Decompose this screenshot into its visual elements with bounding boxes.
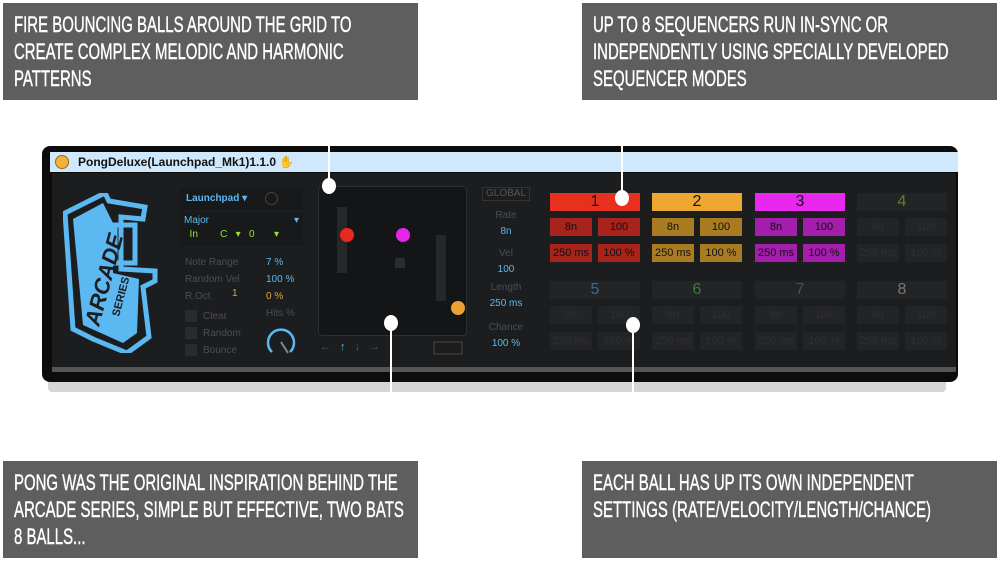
- device panel: 6: [693, 281, 701, 298]
- device panel: 8n: [667, 309, 679, 321]
- device panel: 250 ms: [860, 247, 896, 259]
- callout: each ball settings: [582, 461, 997, 558]
- global column: GLOBAL: [486, 188, 526, 199]
- logo: arcade series: [63, 193, 158, 353]
- device panel: 100: [815, 221, 833, 233]
- device panel: Chance: [489, 322, 523, 333]
- icon: orange circle: [55, 155, 69, 169]
- callout: up to 8 sequencers: [582, 3, 997, 100]
- parameters: Random Vel: [185, 274, 239, 285]
- device panel: 250 ms: [655, 335, 691, 347]
- device panel: Length: [491, 282, 521, 293]
- title bar: PongDeluxe(Launchpad_Mk1)1.1.0 ✋: [78, 155, 294, 169]
- device panel: 4: [898, 193, 906, 210]
- device panel: Rate: [495, 210, 517, 221]
- device panel: 100: [610, 309, 628, 321]
- device panel: 100 %: [910, 247, 942, 259]
- toggles: Random: [203, 328, 241, 339]
- scale selector: Major: [184, 215, 209, 226]
- device panel: 250 ms: [553, 335, 589, 347]
- sequencers: [550, 193, 942, 347]
- device panel: 8n: [500, 226, 512, 237]
- callout lines: [328, 100, 330, 186]
- device panel: 0 %: [266, 291, 283, 302]
- callout: pong inspiration: [3, 461, 418, 558]
- callout: each ball settings: SETTINGS (RATE/VELOCITY/LENGTH/CHANCE): [593, 497, 931, 522]
- device panel: 100 %: [910, 335, 942, 347]
- toggles: [185, 310, 241, 356]
- callout: fire bouncing balls: CREATE COMPLEX MELODIC AND HARMONIC: [14, 39, 344, 64]
- device panel: 250 ms: [860, 335, 896, 347]
- callout: pong inspiration: 8 BALLS...: [14, 524, 86, 549]
- parameters: [185, 257, 239, 302]
- device frame: [42, 146, 958, 382]
- device panel: 2: [693, 193, 701, 210]
- device panel: 8n: [770, 309, 782, 321]
- device panel: 8n: [667, 221, 679, 233]
- device panel: Hits %: [266, 308, 295, 319]
- device panel: 7 %: [266, 257, 283, 268]
- callout: pong inspiration: ARCADE SERIES, SIMPLE BUT EFFECTIVE, TWO BATS: [14, 497, 404, 522]
- callout: up to 8 sequencers: INDEPENDENTLY USING SPECIALLY DEVELOPED: [593, 39, 949, 64]
- launchpad selector: [180, 187, 303, 210]
- device panel: 8n: [872, 309, 884, 321]
- device panel: 100 %: [603, 335, 635, 347]
- scale selector: [180, 212, 303, 246]
- arrow buttons: ←↑↓→: [320, 341, 389, 353]
- device panel: 100 %: [808, 335, 840, 347]
- device panel: 8: [898, 281, 906, 298]
- device panel: 7: [796, 281, 804, 298]
- device panel: 3: [796, 193, 804, 210]
- toggles: Clear: [203, 311, 227, 322]
- device panel: 250 ms: [655, 247, 691, 259]
- device panel: 100: [712, 221, 730, 233]
- logo: arcade series: ARCADE: [79, 230, 129, 329]
- parameters: R.Oct: [185, 291, 211, 302]
- device panel: 100 %: [603, 247, 635, 259]
- device panel: 100: [610, 221, 628, 233]
- title bar: [50, 152, 958, 172]
- callout: fire bouncing balls: PATTERNS: [14, 66, 92, 91]
- callout: up to 8 sequencers: UP TO 8 SEQUENCERS RUN IN-SYNC OR: [593, 12, 888, 37]
- device panel: 250 ms: [553, 247, 589, 259]
- device panel: 1: [232, 288, 238, 299]
- device panel: 5: [591, 281, 599, 298]
- toggles: Bounce: [203, 345, 237, 356]
- scale selector: In C ▾ 0 ▾: [190, 229, 279, 240]
- device shadow: [48, 160, 946, 392]
- launchpad selector: Launchpad ▾: [186, 193, 247, 204]
- device panel: 100: [917, 309, 935, 321]
- parameters: Note Range: [185, 257, 238, 268]
- device panel: 100 %: [705, 335, 737, 347]
- device panel: 250 ms: [758, 247, 794, 259]
- device panel: 1: [591, 193, 599, 210]
- device panel: 100 %: [492, 338, 520, 349]
- scale selector: ▾: [294, 215, 299, 226]
- callout: up to 8 sequencers: SEQUENCER MODES: [593, 66, 747, 91]
- logo: arcade series: SERIES: [110, 276, 132, 318]
- device panel: 8n: [872, 221, 884, 233]
- callout: each ball settings: EACH BALL HAS UP ITS OWN INDEPENDENT: [593, 470, 914, 495]
- device panel: 100 %: [266, 274, 294, 285]
- device panel: 100 %: [705, 247, 737, 259]
- device panel: 250 ms: [758, 335, 794, 347]
- callout: fire bouncing balls: [3, 3, 418, 100]
- device panel: 100: [712, 309, 730, 321]
- device panel: 100 %: [808, 247, 840, 259]
- device panel: 8n: [565, 221, 577, 233]
- global column: [482, 187, 530, 201]
- device panel: 100: [917, 221, 935, 233]
- device panel: [52, 173, 956, 372]
- device panel: Vel: [499, 248, 513, 259]
- callout: pong inspiration: PONG WAS THE ORIGINAL INSPIRATION BEHIND THE: [14, 470, 398, 495]
- device panel: 8n: [565, 309, 577, 321]
- knob: [266, 328, 296, 354]
- device panel: 8n: [770, 221, 782, 233]
- device panel: 250 ms: [490, 298, 522, 309]
- device panel: 100: [498, 264, 514, 275]
- pong grid: [318, 186, 467, 336]
- device panel: 100: [815, 309, 833, 321]
- callout: fire bouncing balls: FIRE BOUNCING BALLS AROUND THE GRID TO: [14, 12, 352, 37]
